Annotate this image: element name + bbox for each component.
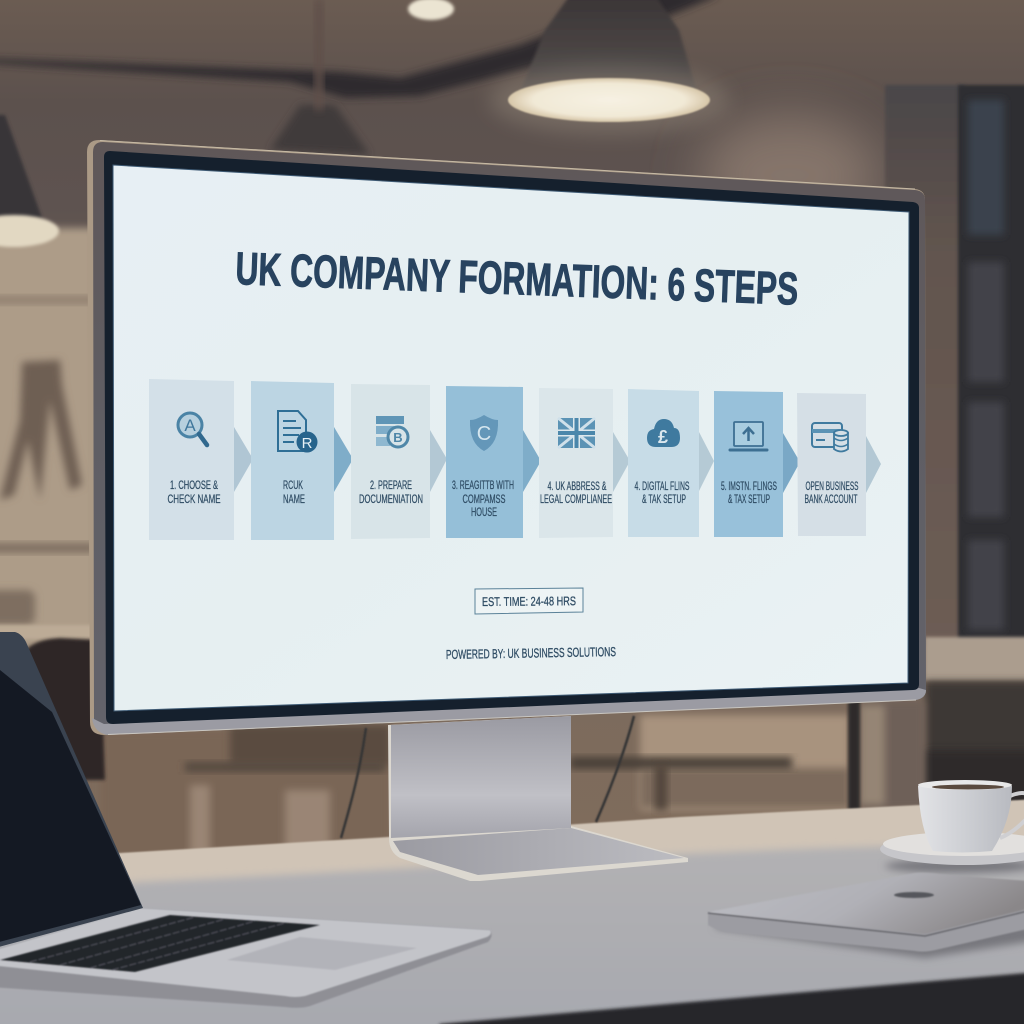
label: 1. CHOOSE & [170,478,218,492]
arrow 5 [613,432,630,492]
icon: stacked documents with badge [376,416,408,447]
screen [113,165,909,711]
label: HOUSE [471,505,497,519]
label: NAME [283,492,305,506]
label [452,478,514,519]
label [634,479,690,506]
label: & TAK SETUP [642,492,686,506]
monitor stand [341,716,688,881]
label: 4. UK ABBRESS & [548,479,606,493]
label [721,479,777,506]
desk surface [0,798,1024,1024]
icon: document with R badge [278,411,318,452]
label: DOCUMENIATION [359,492,423,506]
closed laptop, right foreground [708,873,1024,958]
ceiling light [408,0,454,20]
step card 2 [251,381,334,540]
arrow 6 [699,432,714,491]
icon: cloud with pound sign [647,419,680,447]
step card 7 [714,391,783,537]
label [804,479,858,506]
laptop screen [0,632,143,948]
step card 5 [539,388,613,538]
monitor [87,140,926,735]
icon: union flag [558,418,595,448]
label: 3. REAGITTB WITH [452,478,514,492]
step card 1 [149,379,234,540]
arrow 7 [783,433,800,493]
arrow 2 [334,427,353,492]
icon: document with R badge: R [302,435,313,452]
step card 4 [446,386,523,538]
label [168,478,220,506]
arrow 4 [523,430,541,492]
label: BANK ACCOUNT [804,492,858,506]
icon: shield [470,415,498,451]
trackpad [227,937,417,970]
arrow 1 [234,427,253,492]
label: COMPAMSS [462,492,506,506]
black inner frame [104,151,919,724]
icon: magnifier with letter [178,413,207,445]
monitor bezel [87,140,926,735]
label: LEGAL COMPLIANEE [540,492,612,506]
label: RCUK [283,478,303,492]
label [359,478,423,506]
label: 5. IMSTN. FLINGS [721,479,777,493]
time estimate box [475,588,583,614]
icon: magnifier with letter: A [184,416,196,435]
laptop base [0,908,492,1008]
arrow 8 [866,436,881,493]
pendant lamp, right [489,0,729,134]
label: OPEN BUSINESS [806,479,858,493]
step card 6 [628,389,699,537]
label: & TAX SETUP [728,492,770,506]
coffee cup and saucer [880,780,1024,873]
icon: stacked documents with badge: B [393,430,403,445]
step card 3 [351,384,430,539]
label: CHECK NAME [168,492,220,506]
time estimate box: EST. TIME: 24-48 HRS [482,594,576,609]
arrow 3 [430,430,447,492]
keyboard [0,915,320,972]
pendant lamp, left [0,115,59,247]
step card 8 [797,393,866,536]
label: 4. DIGITAL FLINS [634,479,690,493]
icon: laptop with upload arrow [730,422,767,450]
label: 2. PREPARE [370,478,412,492]
icon: shield: C [477,423,491,445]
laptop, left foreground [0,632,492,1008]
footer credit: POWERED BY: UK BUSINESS SOLUTIONS [446,644,616,662]
label [283,478,305,506]
icon: bank card and coins [812,423,848,452]
icon: cloud with pound sign: £ [658,427,668,447]
label [540,479,612,506]
